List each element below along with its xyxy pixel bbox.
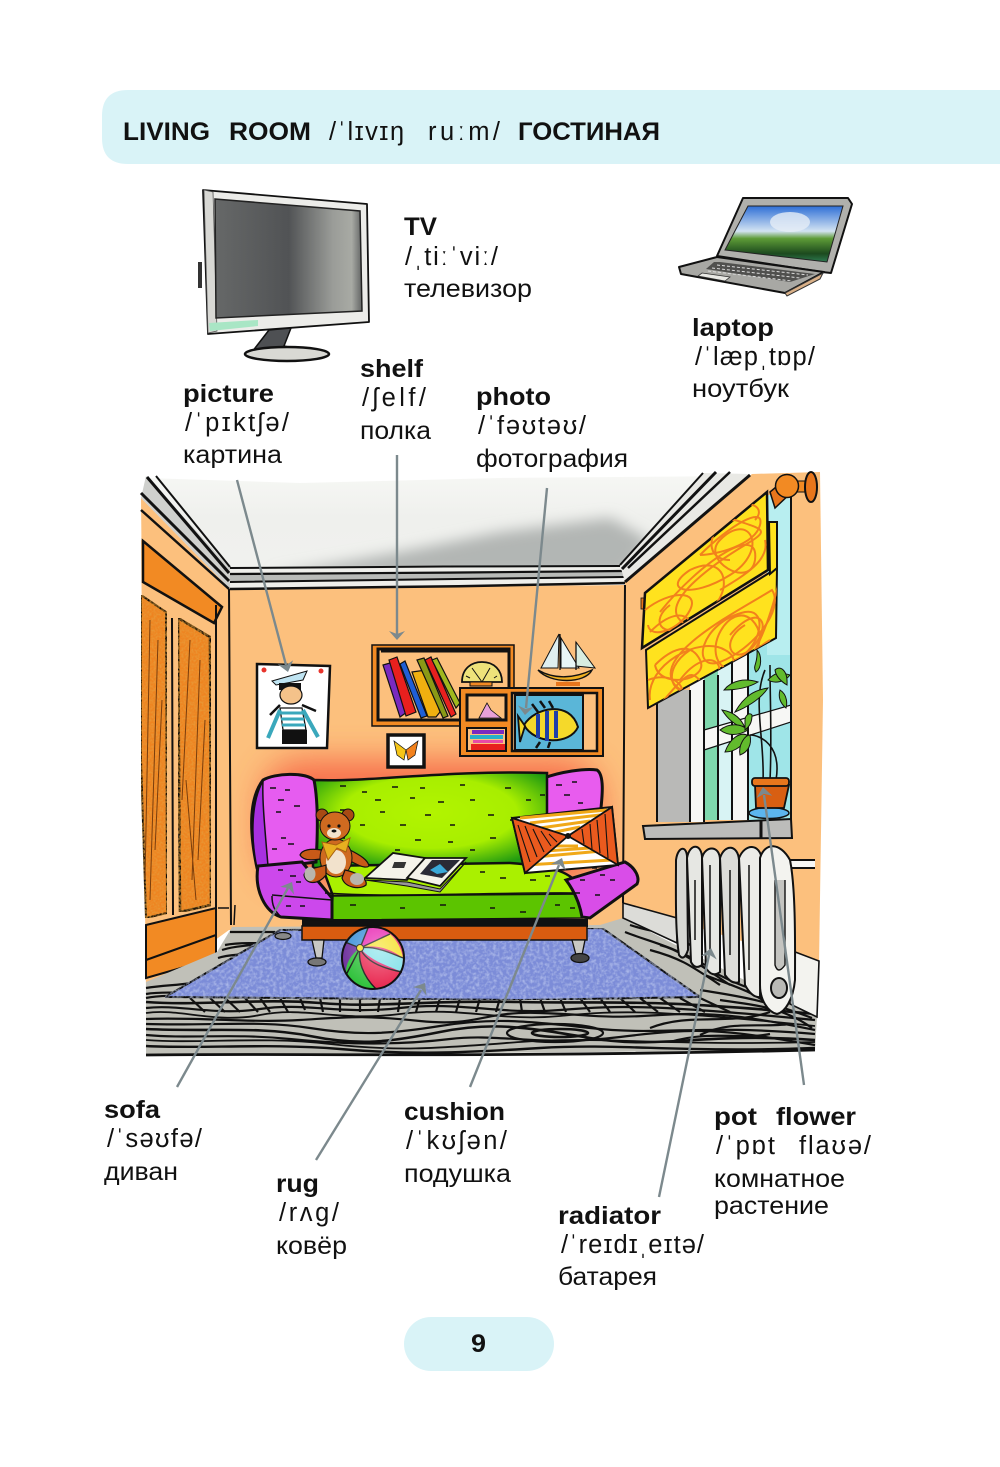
cornice: back [230,566,625,589]
label: pot flower: flower [776,1103,856,1131]
label: laptop: ноутбук [692,375,790,403]
wall corners [229,585,625,925]
label: cushion: подушка [404,1160,511,1188]
plant [720,650,790,782]
curtain rod [770,472,817,508]
arrow: shelf [389,455,405,640]
label: pot flower: /ˈpɒt [716,1132,775,1160]
wardrobe [141,540,235,985]
label: photo: /ˈfəʊtəʊ/ [478,412,587,440]
label: shelf: shelf [360,355,424,383]
arrow: pot flower [755,786,804,1085]
back wall [229,585,625,930]
label: picture: /ˈpɪktʃə/ [185,409,290,437]
arrow: photo [517,488,547,716]
roller blind [641,492,778,708]
header band [102,90,1000,164]
window sill [643,819,792,839]
label: sofa: sofa [104,1096,161,1124]
label: sofa: /ˈsəʊfə/ [107,1125,203,1153]
ceiling [146,476,745,575]
label: shelf: полка [360,417,431,445]
label: TV: /ˌtiːˈviː/ [405,243,499,271]
photo of fish [515,695,583,750]
left wall [141,498,229,990]
sofa seat [322,863,585,896]
sofa dashes [270,782,615,912]
label: radiator: батарея [558,1263,657,1291]
label: TV [404,213,532,303]
label: photo: фотография [476,445,628,473]
sofa left arm [252,774,332,920]
label: picture: картина [183,441,282,469]
arrow: sofa [177,878,299,1087]
flower pot [749,778,789,818]
label: laptop [692,314,816,403]
model ship [538,634,595,686]
label: laptop: laptop [692,314,774,342]
rug [165,928,700,1000]
shelf with books [372,645,514,726]
page number: 9 [471,1330,486,1358]
ball [342,927,404,989]
label: cushion: /ˈkʊʃən/ [406,1127,508,1155]
label: radiator: radiator [558,1202,661,1230]
header band: LIVING [123,118,210,146]
baseboard right [623,903,819,1017]
label: shelf [360,355,431,445]
label: laptop: /ˈlæpˌtɒp/ [695,343,816,371]
arrow: cushion [470,855,569,1087]
teddy bear [300,809,369,888]
sofa right arm back [544,769,602,860]
label: radiator [558,1202,705,1291]
label: pot flower: растение [714,1192,829,1220]
label: shelf: /ʃelf/ [362,384,427,412]
arrow: rug [316,979,432,1160]
label: TV: телевизор [404,275,532,303]
label: pot flower [714,1103,872,1220]
open book [365,853,466,892]
label: rug: rug [276,1170,319,1198]
arrow: radiator [659,946,719,1197]
small butterfly frame [388,735,424,767]
clock [462,662,502,686]
label: photo [476,383,628,473]
label: picture: picture [183,380,274,408]
floor [146,918,817,1056]
label: sofa: диван [104,1158,178,1186]
label: pot flower: комнатное [714,1165,845,1193]
label: radiator: /ˈreɪdɪˌeɪtə/ [561,1231,705,1259]
sofa frame [275,919,589,966]
arrow: picture [237,480,296,674]
header band: ГОСТИНАЯ [518,118,660,146]
red glow behind sofa [262,760,602,885]
header band: ruːm/ [428,118,501,146]
label: sofa [104,1096,203,1186]
label: pot flower: flaʊə/ [799,1132,872,1160]
header band: ROOM [229,118,311,146]
label: rug: /rʌg/ [279,1199,340,1227]
cornice: left [141,476,230,589]
label: rug [276,1170,347,1260]
right wall [625,472,823,965]
icon: TV [198,190,369,361]
shelf unit with photo [460,688,603,756]
sofa right arm [566,862,638,918]
cornice: right [620,472,750,582]
icon: laptop [679,198,852,296]
label: cushion: cushion [404,1098,505,1126]
label: cushion [404,1098,511,1188]
cushion [512,807,618,873]
header band: /ˈlɪvɪŋ [329,118,404,146]
window [657,490,791,838]
label: rug: ковёр [276,1232,347,1260]
illustration: living room [141,472,823,1056]
sofa back [313,773,547,868]
label: pot flower: pot [714,1103,758,1131]
radiator [676,846,815,1014]
page number [404,1317,554,1371]
label: photo: photo [476,383,551,411]
picture poster [257,664,330,748]
sofa [252,769,638,966]
sofa front [332,894,583,920]
label: TV: TV [404,213,437,241]
label: picture [183,380,290,469]
